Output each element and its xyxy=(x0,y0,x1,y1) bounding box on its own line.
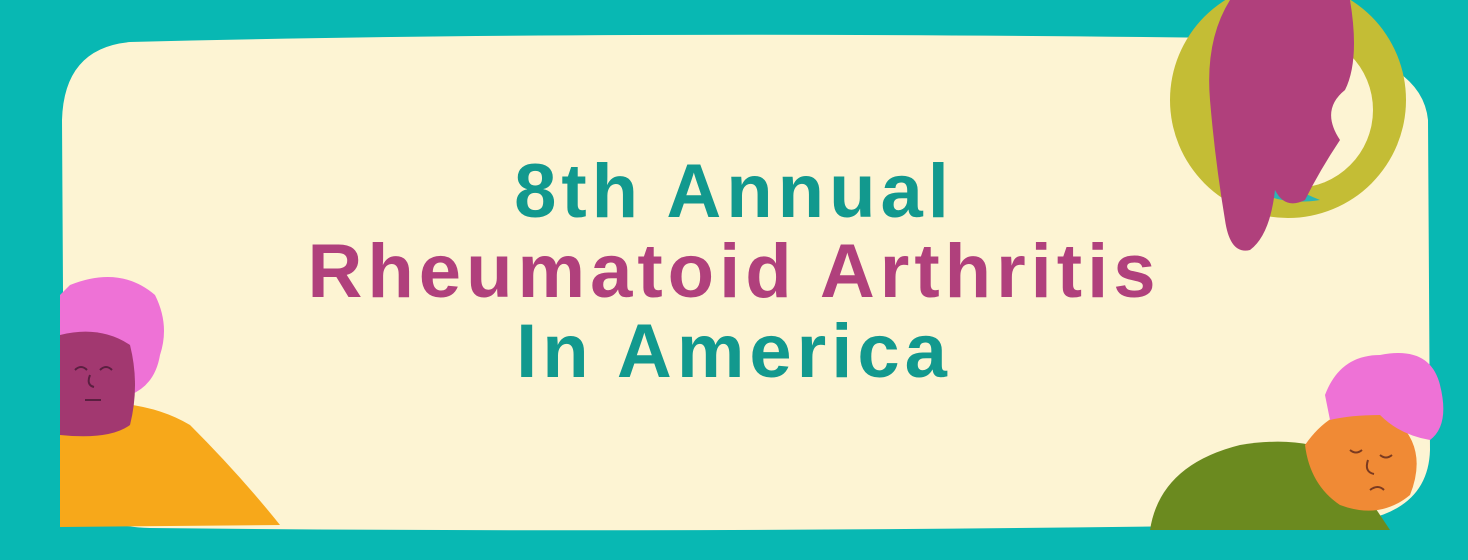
illustration: bottom left person xyxy=(60,277,280,527)
illustration: bottom right person xyxy=(1150,353,1444,530)
title line 1: 8th Annual xyxy=(514,149,954,234)
illustration: top right figure xyxy=(1170,0,1406,251)
title line 2: Rheumatoid Arthritis xyxy=(308,229,1160,314)
title xyxy=(308,149,1160,394)
title line 3: In America xyxy=(516,309,952,394)
